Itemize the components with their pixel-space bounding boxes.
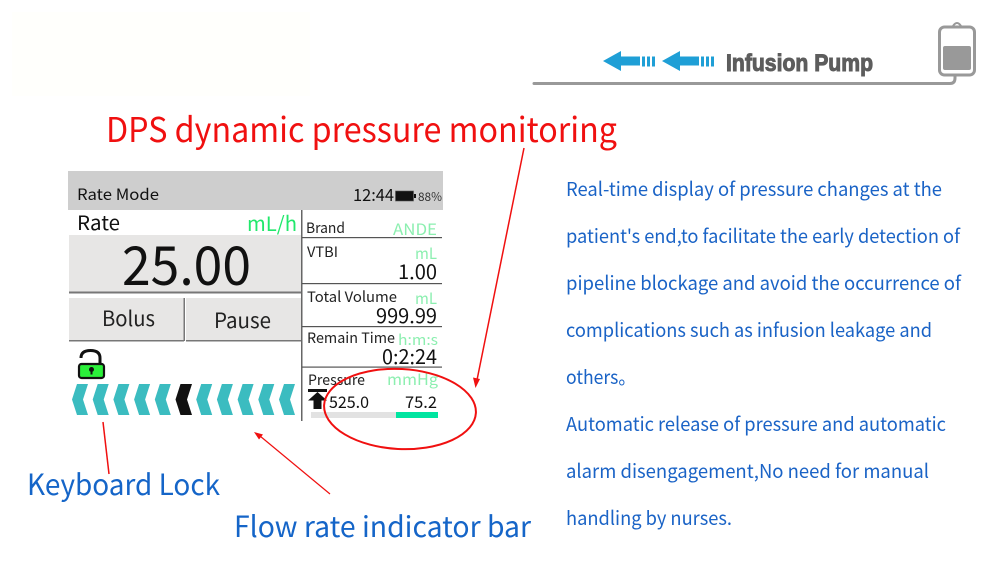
screen status bar: Rate Mode <box>77 183 159 205</box>
rate label: Rate <box>77 207 120 236</box>
row: Remain Time <box>302 327 442 370</box>
description text block: alarm disengagement,No need for manual <box>566 457 929 484</box>
arrow: flow rate bar <box>254 432 330 494</box>
rate unit: mL/h <box>247 208 297 237</box>
flow rate indicator chevrons <box>72 384 295 415</box>
heading: DPS dynamic pressure monitoring: DPS dynamic pressure monitoring <box>106 103 617 152</box>
screen status bar: 12:44 <box>353 182 394 206</box>
row: Pressure <box>308 368 438 418</box>
description text block: Automatic release of pressure and automatic <box>566 410 946 437</box>
icon: open lock <box>79 350 104 378</box>
row: Total Volume <box>302 286 442 329</box>
row: VTBI: 1.00 <box>398 256 437 285</box>
row: Remain Time: 0:2:24 <box>382 341 437 370</box>
description text block <box>566 175 962 531</box>
row: Brand <box>302 217 442 240</box>
row: Remain Time: h:m:s <box>398 329 438 350</box>
description text block: complications such as infusion leakage and <box>566 316 932 343</box>
description text block: Real-time display of pressure changes at the <box>566 175 942 202</box>
row: VTBI: VTBI <box>307 242 338 262</box>
row: Total Volume: Total Volume <box>307 286 397 307</box>
row: Pressure: Pressure <box>308 369 365 390</box>
description text block: handling by nurses. <box>566 504 732 531</box>
arrow: heading to pressure <box>473 148 524 388</box>
description text block: pipeline blockage and avoid the occurrence of <box>566 269 962 296</box>
label: Keyboard Lock: Keyboard Lock <box>27 462 220 504</box>
callout ellipse: pressure readout <box>322 365 478 453</box>
icon: pressure limit arrow <box>308 389 327 409</box>
description text block: others。 <box>566 363 636 390</box>
header title: Infusion Pump <box>726 50 873 77</box>
row: Total Volume: 999.99 <box>376 300 437 329</box>
rate value display <box>69 222 301 301</box>
row: Brand: Brand <box>306 217 345 238</box>
header: infusion pump banner <box>534 23 974 84</box>
row: Pressure: mmHg <box>387 368 438 390</box>
button: Pause: Pause <box>214 305 271 335</box>
row: Pressure: 525.0 <box>329 389 369 413</box>
screen status bar <box>68 171 443 210</box>
row: Remain Time: Remain Time <box>307 327 395 348</box>
panel divider <box>301 210 302 421</box>
header baseline tube <box>534 74 955 84</box>
faint watermark <box>12 12 310 96</box>
arrow: keyboard lock <box>103 422 109 474</box>
description text block: patient's end,to facilitate the early detection of <box>566 222 961 249</box>
panel: pump screen <box>68 171 443 421</box>
row: VTBI <box>302 242 442 285</box>
rate value display: 25.00 <box>122 222 251 301</box>
row: Brand: ANDE <box>393 218 437 240</box>
row: Total Volume: mL <box>415 287 437 309</box>
button: Bolus <box>69 298 185 342</box>
label: Flow rate indicator bar: Flow rate indicator bar <box>234 504 532 546</box>
screen status bar: 88% <box>418 188 442 205</box>
icon: double left arrows <box>603 51 714 71</box>
icon: infusion bag <box>940 23 974 75</box>
row: Pressure: 75.2 <box>405 389 437 413</box>
row: VTBI: mL <box>415 242 437 264</box>
button: Pause <box>186 298 301 342</box>
button: Bolus: Bolus <box>102 303 155 333</box>
